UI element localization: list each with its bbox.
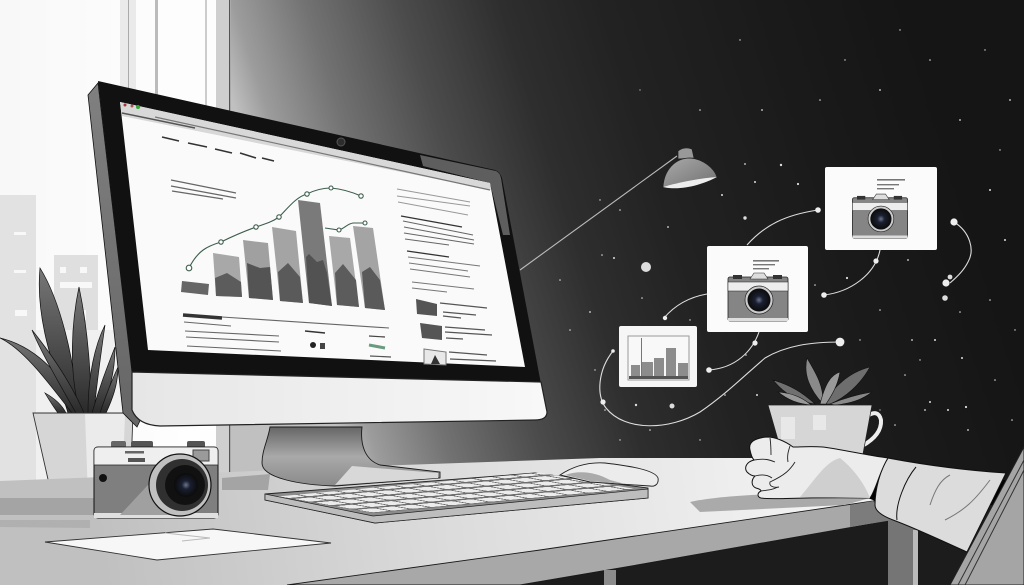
monitor bezel: [98, 81, 541, 384]
thumbnails: [416, 299, 437, 316]
sleeve: [875, 458, 1006, 552]
monitor: [88, 81, 547, 427]
screen: [120, 102, 525, 367]
mouse: [560, 463, 658, 486]
desk surface: [0, 458, 1024, 585]
floating card: large camera: [825, 167, 937, 250]
browser toolbar: [120, 102, 491, 190]
connector path: curved lines and nodes: [600, 207, 971, 426]
nav dashes: [162, 137, 274, 161]
potted plant on desk: [0, 268, 133, 497]
monitor chin: [132, 372, 547, 426]
headline lines: [171, 180, 236, 199]
floating card: mini bar chart: [619, 326, 697, 387]
window with city view: [0, 0, 232, 490]
lower-left text lines: [183, 315, 222, 318]
photo print on desk: [45, 529, 331, 560]
hand: [746, 437, 888, 499]
keyboard: [265, 473, 648, 523]
starfield: [559, 29, 1016, 441]
coffee cup with plant: [768, 358, 881, 454]
trend lines: [186, 186, 367, 271]
monitor side: [88, 83, 150, 427]
monitor stand: [262, 427, 440, 486]
webcam: [337, 138, 345, 146]
hand with shirt sleeve: [746, 437, 1006, 552]
floating card: medium camera: [707, 246, 808, 332]
right column text: [397, 189, 470, 215]
desk lamp: [520, 148, 717, 270]
camera on desk: [94, 441, 218, 518]
bar chart: [181, 200, 385, 310]
dark wall: [231, 0, 1024, 480]
foreground panel, lower right: [950, 447, 1024, 585]
